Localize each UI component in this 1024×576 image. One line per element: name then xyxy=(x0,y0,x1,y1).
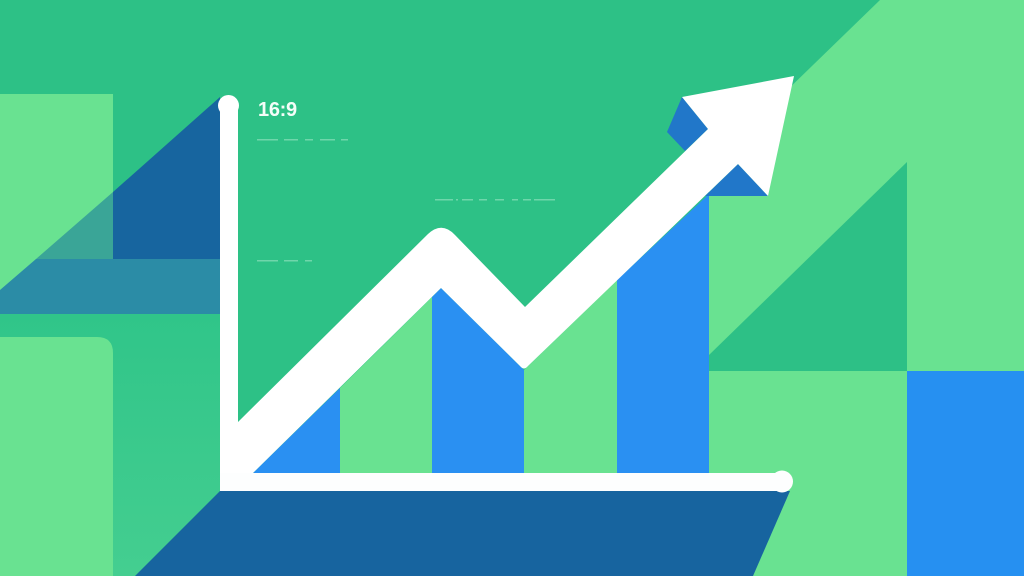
horizontal axis xyxy=(220,470,793,492)
panel: translucent teal triangle xyxy=(36,192,113,259)
bar chart xyxy=(253,194,709,473)
panel: lower left light green block with rounded corner xyxy=(0,337,113,576)
vertical axis xyxy=(218,95,239,491)
arrow: white rising trend line xyxy=(226,76,794,480)
panel: top right light green field xyxy=(709,0,1024,576)
panel: teal horizontal band xyxy=(0,259,220,314)
heading: 16:9: 16:9 xyxy=(258,99,297,121)
arrow shadow: upper blue facet xyxy=(667,97,708,151)
bar: blue 3 xyxy=(432,288,524,473)
panel: lower left green block xyxy=(0,314,220,576)
bar: light green 4 xyxy=(524,280,617,473)
panel: upper left green corner below diagonal xyxy=(0,259,36,290)
bar: light green 2 xyxy=(340,297,432,473)
panel: navy floor xyxy=(135,491,790,576)
panel: bottom right blue square xyxy=(907,371,1024,576)
arrow shadow: lower blue facet xyxy=(705,164,768,196)
panel: upper left light green block xyxy=(0,94,113,290)
panel: dark green triangle xyxy=(709,162,907,371)
faint text line 1 xyxy=(257,139,348,140)
faint text line 2 xyxy=(435,199,555,200)
bar: blue 1 xyxy=(253,388,340,473)
panel: navy triangle behind axis xyxy=(113,97,220,259)
faint text line 3 xyxy=(257,260,312,262)
bar: blue 5 xyxy=(617,194,709,473)
